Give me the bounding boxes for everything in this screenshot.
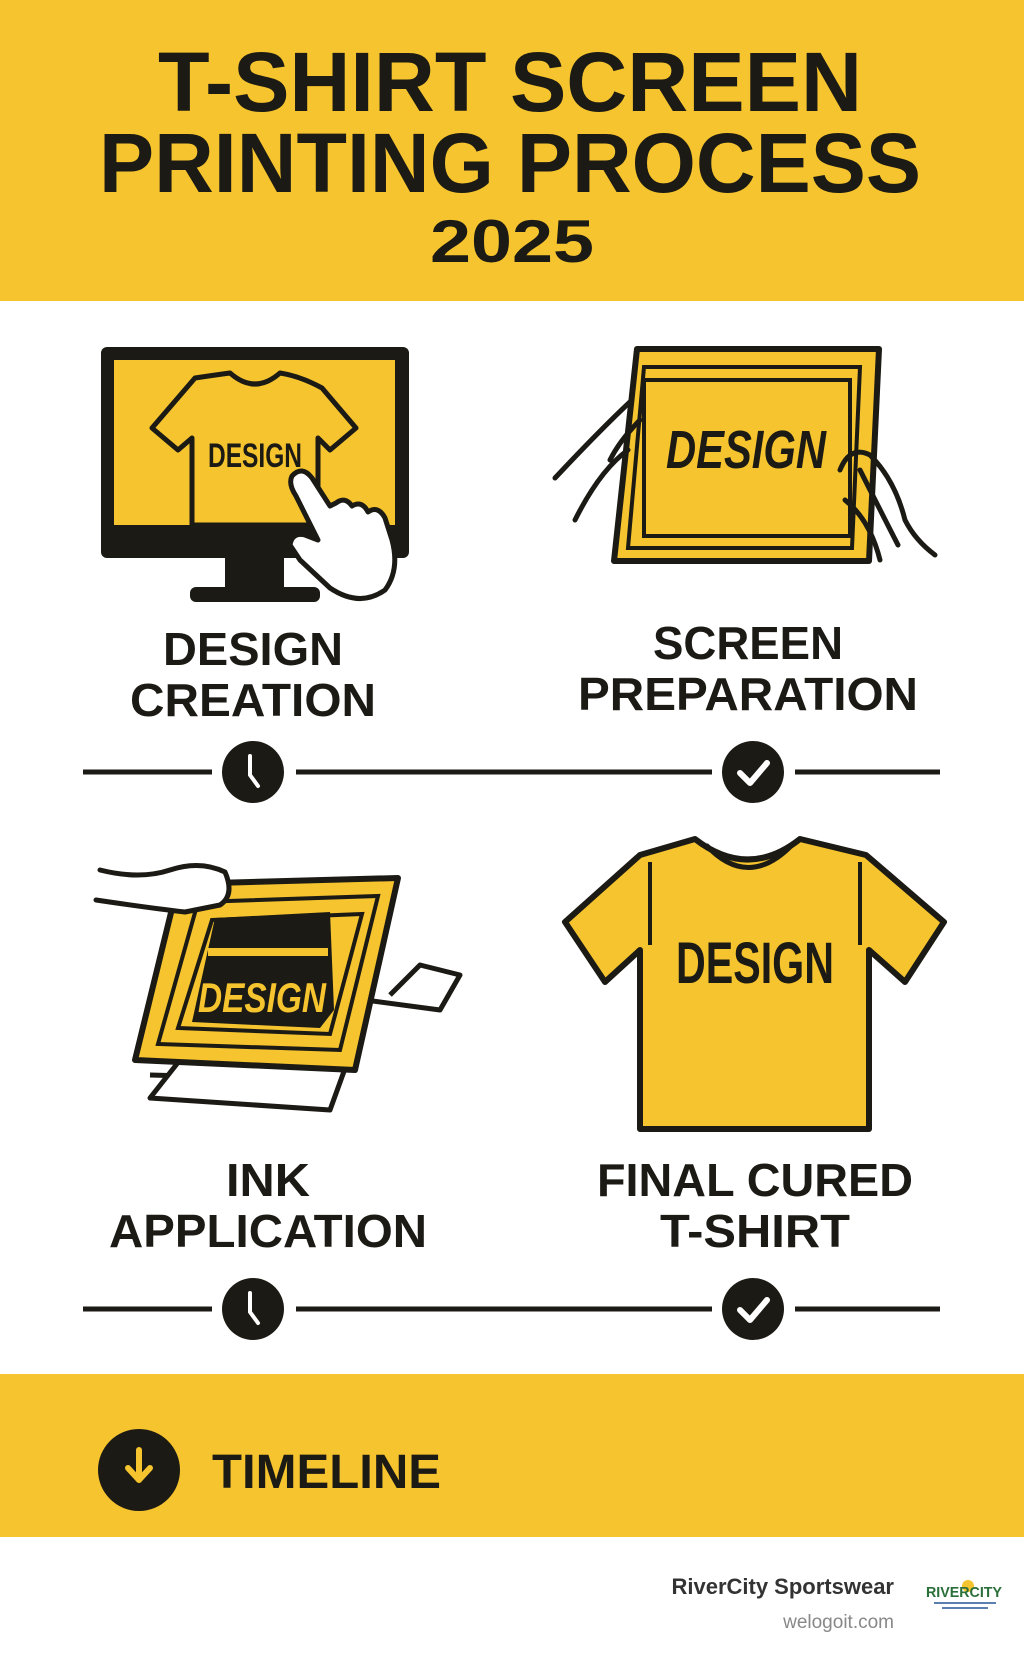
label: final cured t-shirt: T-SHIRT <box>660 1205 850 1257</box>
icon: clock marker <box>222 741 284 803</box>
icon: ink application with squeegee: DESIGN <box>198 974 327 1021</box>
icon: monitor with shirt design <box>101 347 409 602</box>
title: T-SHIRT SCREEN <box>158 35 862 129</box>
logo: rivercity <box>926 1580 1002 1609</box>
icon: final t-shirt: DESIGN <box>676 931 834 996</box>
label: ink application: APPLICATION <box>109 1205 427 1257</box>
logo: rivercity: RIVERCITY <box>926 1584 1002 1601</box>
icon: timeline arrow circle <box>98 1429 180 1511</box>
footer band: timeline <box>0 1374 1024 1537</box>
label: screen preparation <box>578 617 918 720</box>
icon: check marker <box>722 1278 784 1340</box>
icon: ink application with squeegee <box>96 865 460 1110</box>
timeline row 1 <box>83 741 940 803</box>
icon: monitor with shirt design: DESIGN <box>208 437 302 475</box>
icon: check marker <box>722 741 784 803</box>
timeline heading: TIMELINE <box>212 1446 441 1499</box>
label: final cured t-shirt: FINAL CURED <box>597 1154 913 1206</box>
icon: screen frame held by hands: DESIGN <box>666 420 827 480</box>
label: ink application: INK <box>226 1154 310 1206</box>
label: design creation: CREATION <box>130 674 376 726</box>
year: 2025 <box>430 208 594 275</box>
label: final cured t-shirt <box>597 1154 913 1257</box>
label: design creation: DESIGN <box>163 623 343 675</box>
header band <box>0 0 1024 301</box>
credit text: welogoit.com <box>782 1612 894 1633</box>
label: design creation <box>130 623 376 726</box>
label: screen preparation: SCREEN <box>653 617 843 669</box>
title <box>99 35 921 210</box>
credit text <box>671 1574 894 1633</box>
icon: screen frame held by hands <box>555 349 935 561</box>
timeline row 2 <box>83 1278 940 1340</box>
title: PRINTING PROCESS <box>99 116 921 210</box>
label: ink application <box>109 1154 427 1257</box>
label: screen preparation: PREPARATION <box>578 668 918 720</box>
credit text: RiverCity Sportswear <box>671 1574 894 1599</box>
icon: clock marker <box>222 1278 284 1340</box>
icon: final t-shirt <box>565 839 944 1129</box>
